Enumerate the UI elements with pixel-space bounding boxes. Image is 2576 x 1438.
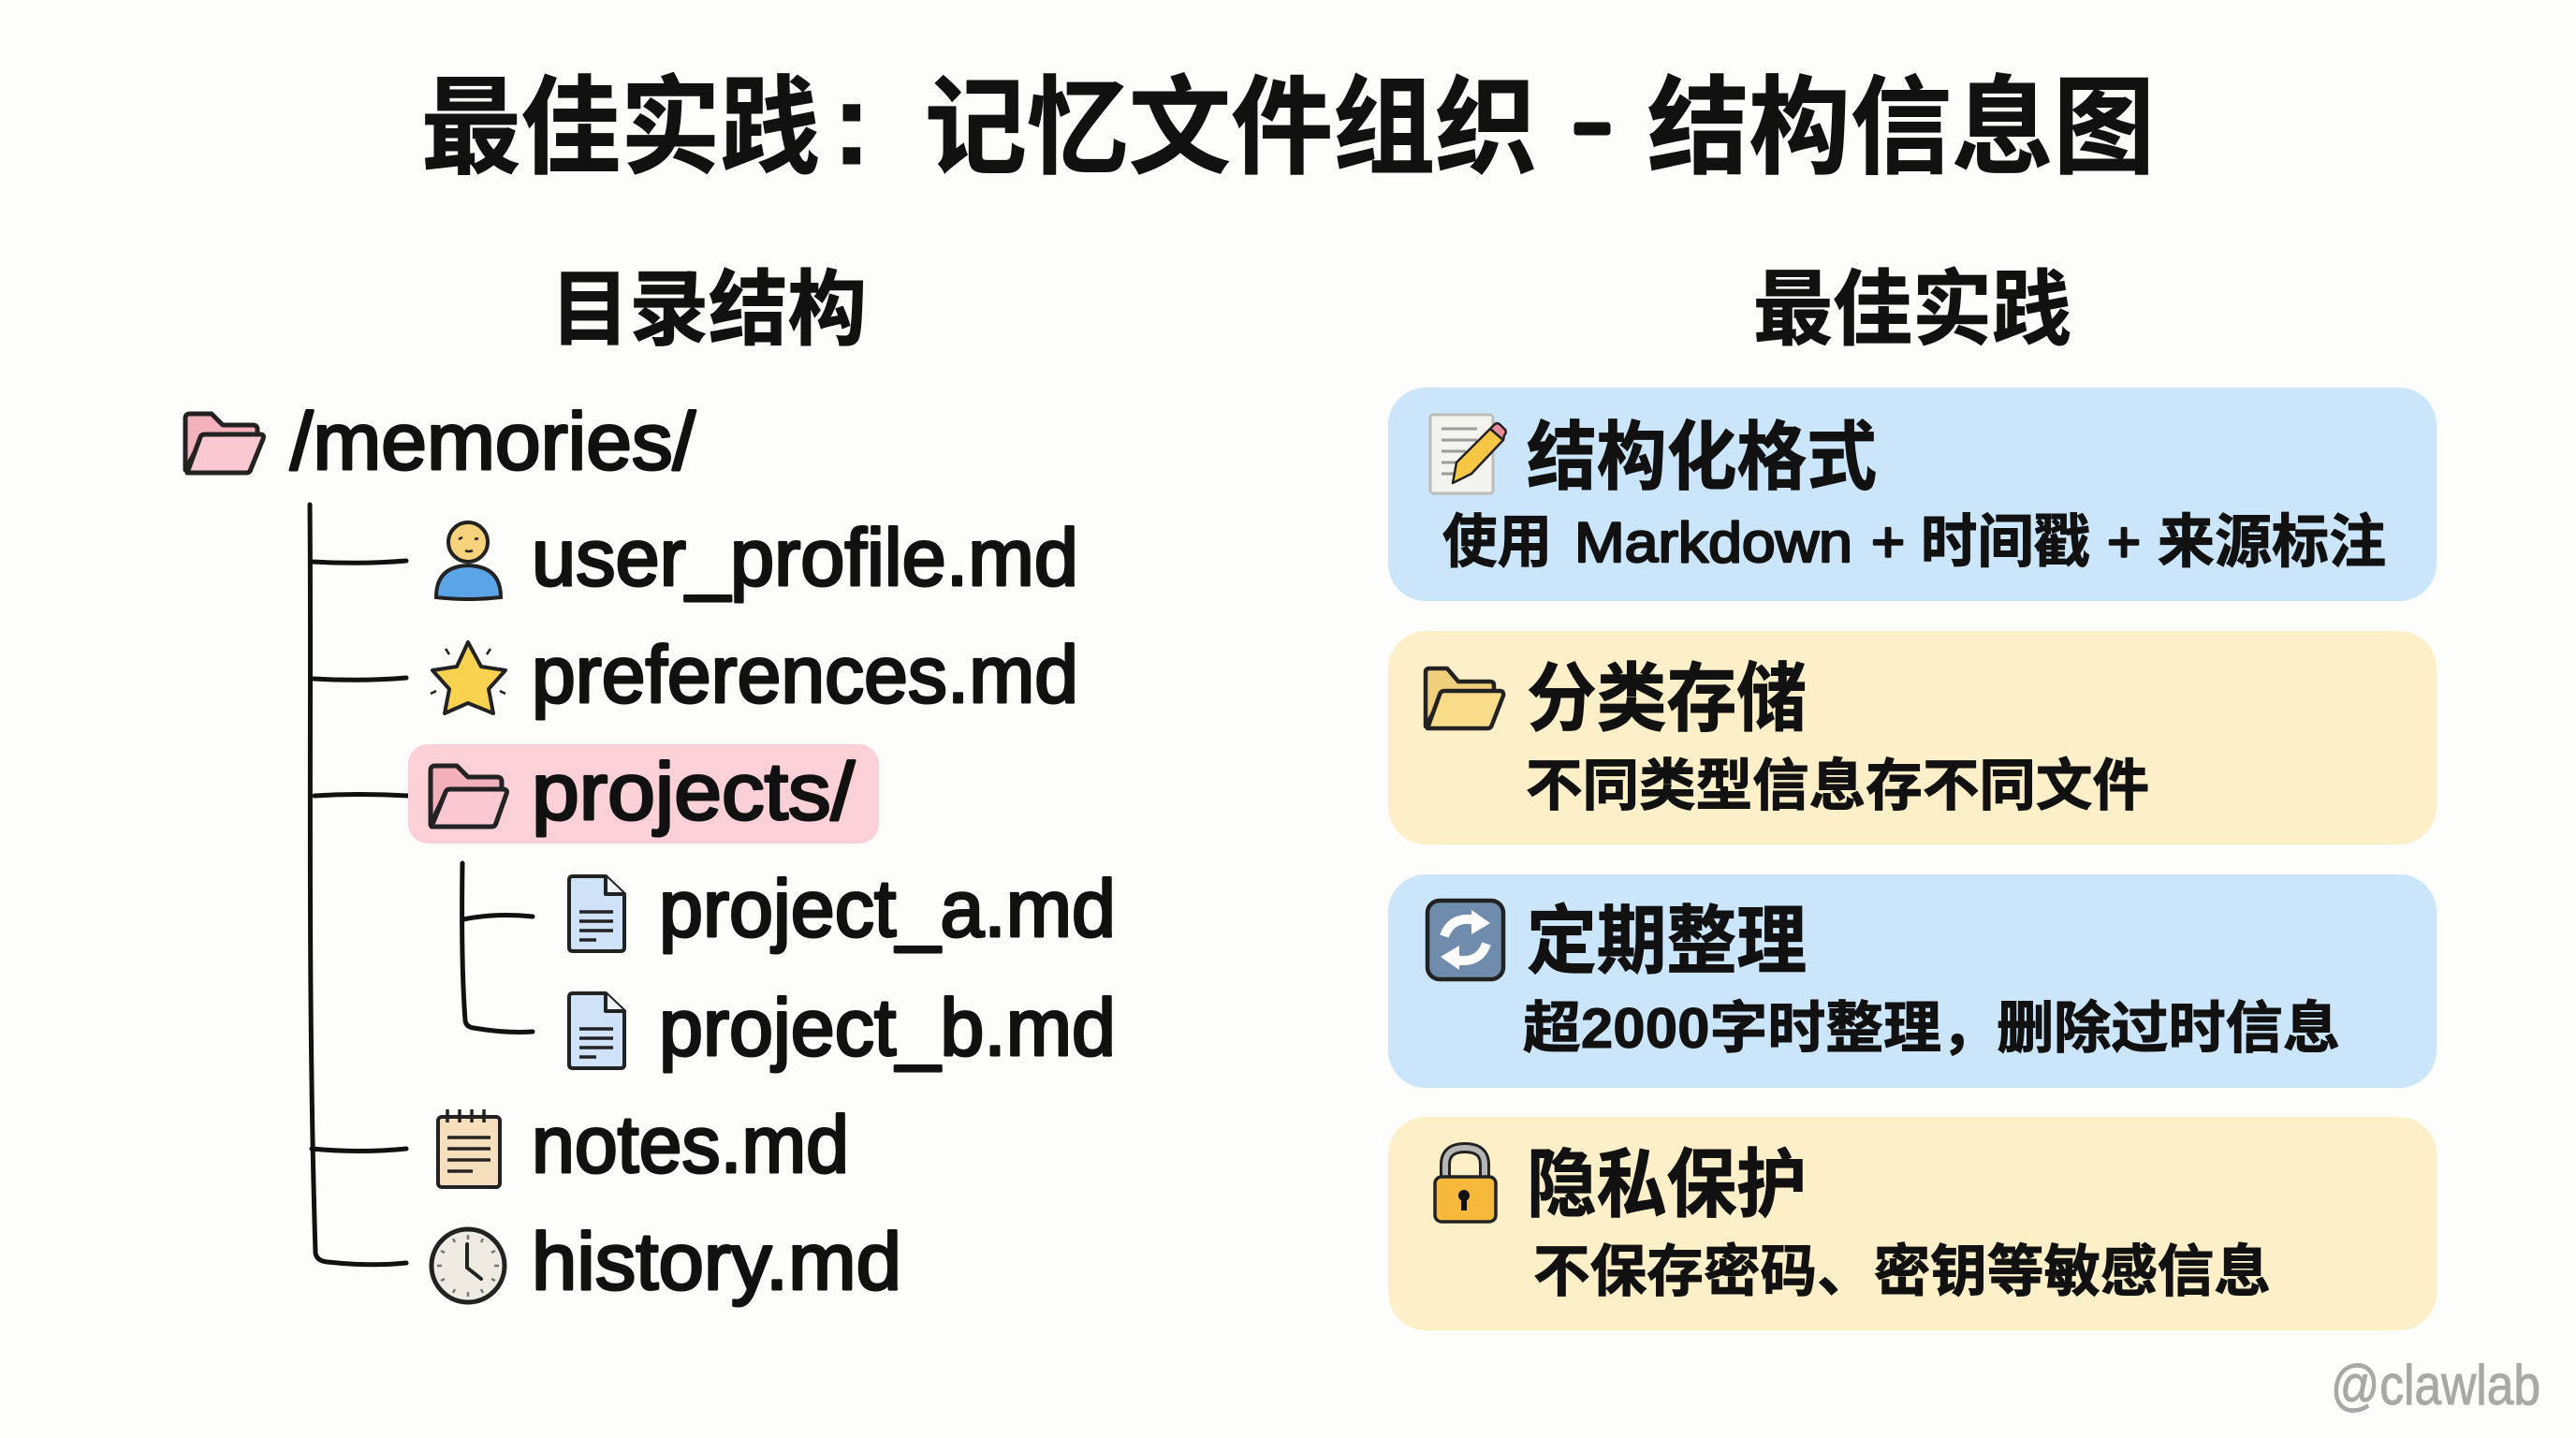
- card heading: 隐私保护: [1527, 1143, 1807, 1226]
- heading: best practices: 最佳实践: [1753, 263, 2071, 356]
- highlight: projects row: [408, 744, 879, 844]
- title: [421, 59, 2155, 189]
- sub-tree connector lines: [462, 863, 533, 1032]
- card heading: 分类存储: [1527, 657, 1807, 741]
- icon: document a: [569, 876, 624, 951]
- panel: structured format: [1388, 388, 2437, 601]
- panel: regular cleanup: [1388, 874, 2437, 1088]
- card text: +: [2107, 510, 2141, 575]
- card text: 使用: [1442, 510, 1552, 575]
- card text: +: [1871, 510, 1905, 575]
- label: projects: projects/: [532, 747, 855, 837]
- panel: categorized storage: [1388, 631, 2437, 844]
- icon: user: [436, 522, 501, 599]
- card text: ，: [1941, 997, 1998, 1060]
- title: 最佳实践: [421, 69, 820, 188]
- card text: 不同类型信息存不同文件: [1526, 755, 2149, 817]
- card text: 不保存密码、密钥等敏感信息: [1533, 1240, 2271, 1303]
- title: 结构信息图: [1647, 69, 2155, 188]
- icon: clock: [432, 1229, 505, 1302]
- icon: notepad and pencil: [1430, 415, 1506, 493]
- icon: star: [431, 642, 505, 713]
- card text: 来源标注: [2158, 510, 2386, 575]
- label: user_profile: user_profile.md: [532, 513, 1078, 603]
- root label: /memories/: [290, 397, 695, 487]
- root folder icon: [185, 414, 264, 473]
- panel: privacy protection: [1388, 1117, 2437, 1330]
- label: project_a: project_a.md: [659, 864, 1116, 954]
- card text: 超2000字时整理: [1523, 997, 1941, 1060]
- title: 记忆文件组织: [925, 69, 1537, 188]
- label: preferences: preferences.md: [532, 630, 1078, 720]
- icon: refresh: [1427, 901, 1503, 979]
- label: project_b: project_b.md: [659, 983, 1116, 1073]
- card heading: 定期整理: [1527, 900, 1807, 983]
- main tree connector lines: [310, 505, 408, 1265]
- label: history: history.md: [532, 1217, 901, 1307]
- icon: notepad: [438, 1109, 500, 1187]
- card text: [1442, 510, 2386, 575]
- label: notes: notes.md: [532, 1100, 849, 1190]
- icon: projects folder: [431, 766, 507, 827]
- card heading: 结构化格式: [1527, 416, 1877, 499]
- card text: 时间戳: [1921, 510, 2090, 575]
- icon: padlock: [1435, 1148, 1496, 1222]
- panel: directory tree: [185, 397, 1116, 1307]
- watermark: @clawlab: [2331, 1354, 2540, 1416]
- heading: directory structure: 目录结构: [550, 263, 867, 356]
- card text: 删除过时信息: [1997, 997, 2340, 1060]
- icon: document b: [569, 993, 624, 1068]
- icon: yellow folder: [1426, 668, 1503, 728]
- card text: [1523, 997, 2340, 1060]
- card text: Markdown: [1574, 511, 1852, 574]
- title: :: [832, 59, 871, 189]
